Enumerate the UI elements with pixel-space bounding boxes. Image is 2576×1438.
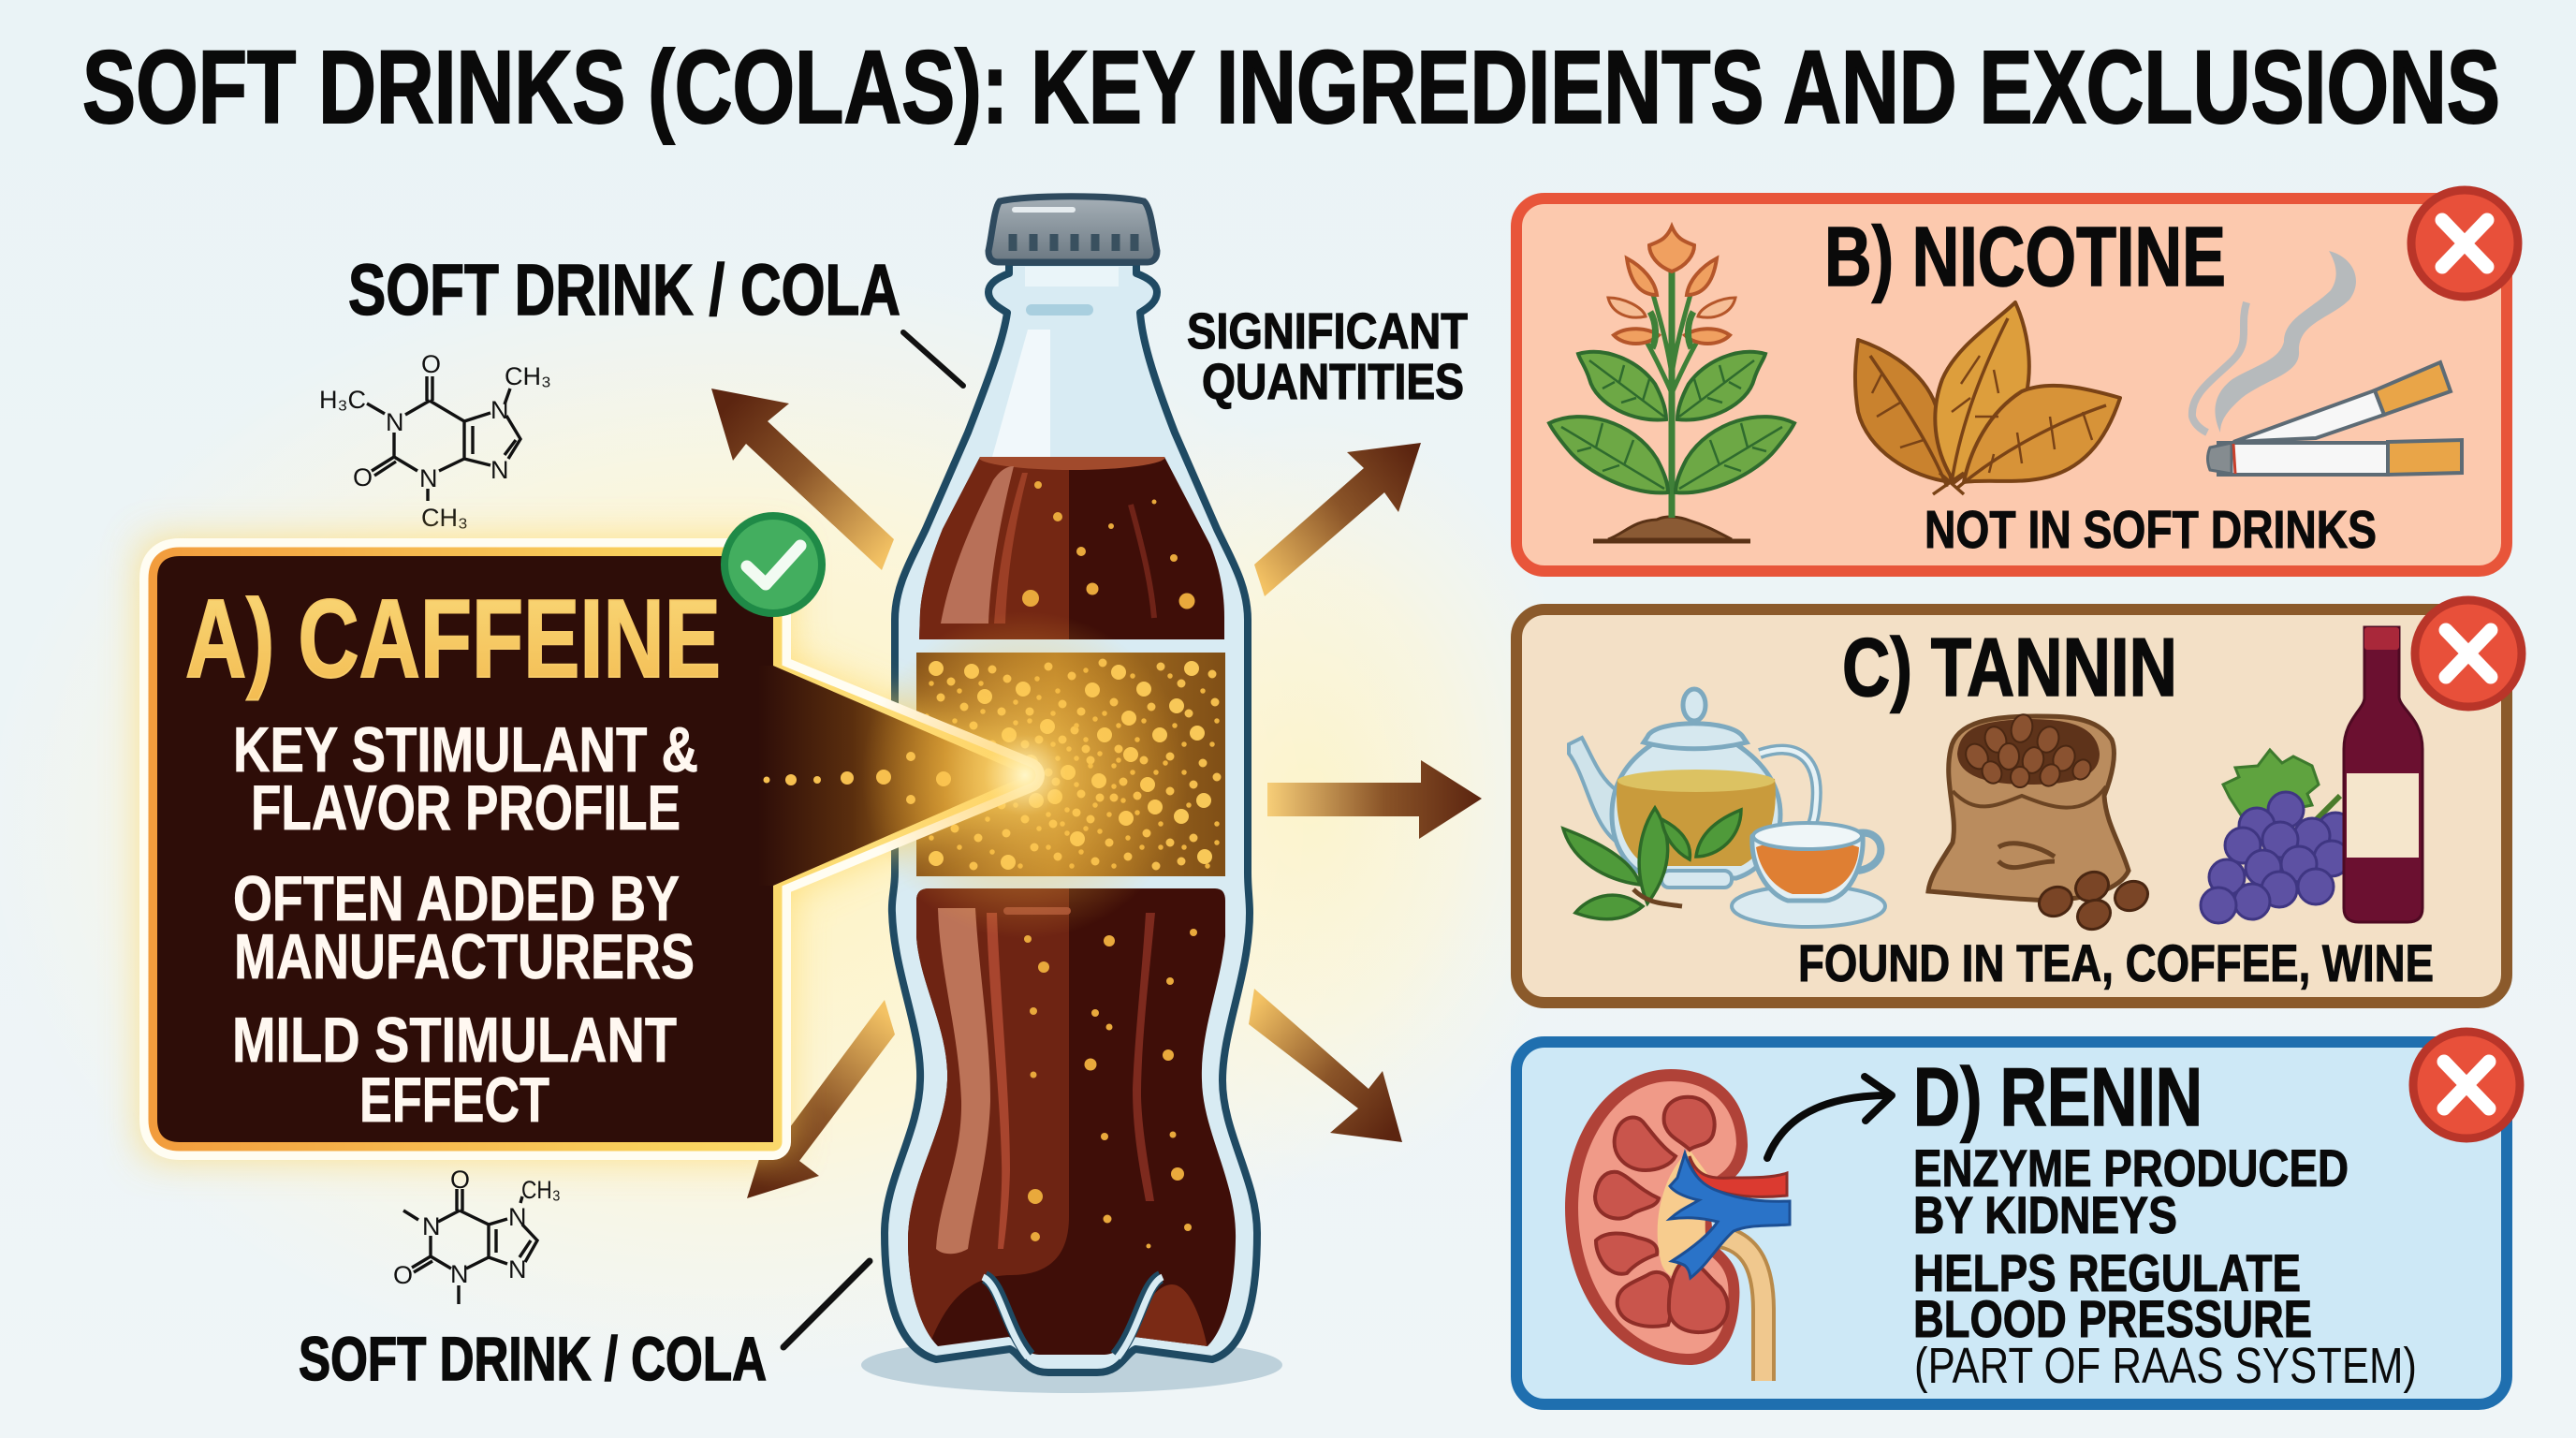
text: mild stimulant: EFFECT [359,1064,549,1136]
caffeine molecule top: O [421,350,441,378]
pointer sparkle dots [764,752,951,804]
caffeine molecule bottom: O [450,1166,470,1194]
caffeine molecule top: N [490,456,509,484]
text: enzyme produced by kidneys: BY KIDNEYS [1913,1185,2177,1244]
arrow: middle right [1267,760,1482,839]
caffeine molecule bottom: N [508,1203,526,1231]
caffeine molecule top: CH₃ [421,504,468,532]
text: helps regulate blood pressure [1913,1243,2312,1348]
bottle base notches [983,1277,1163,1357]
upper liquid [919,457,1224,639]
arrow: upper left [711,389,894,570]
text: found in tea, coffee, wine: FOUND IN TEA, COFFEE, WINE [1798,933,2434,992]
label: soft drink / cola top [348,250,963,386]
caffeine molecule top: O [353,463,373,492]
text: key stimulant: FLAVOR PROFILE [251,772,681,844]
text: mild stimulant: MILD STIMULANT [232,1005,677,1076]
icon: cigarettes [2207,362,2462,475]
caffeine molecule top: CH₃ [505,362,551,390]
caffeine molecule bottom: N [422,1212,440,1240]
pointer gradient [758,666,1027,886]
icon: smoke wisp [2192,302,2247,433]
icon: X badge [2413,1032,2520,1138]
text: helps regulate blood pressure: HELPS REGULATE [1913,1243,2301,1302]
icon: X badge [2415,600,2522,707]
text: helps regulate blood pressure: BLOOD PRESSURE [1913,1289,2312,1348]
text: key stimulant: KEY STIMULANT & [233,714,698,785]
icon: tobacco leaves [1855,302,2120,494]
heading: B) Nicotine: B) NICOTINE [1824,211,2226,304]
text: key stimulant [233,714,698,844]
label band with bubbles [916,653,1225,876]
heading: D) Renin: D) RENIN [1913,1050,2203,1143]
icon: kidney [1565,1069,1790,1381]
panel D: renin [1516,1032,2520,1404]
icon: curved arrow [1767,1077,1892,1158]
heading: C) Tannin: C) TANNIN [1842,621,2177,713]
text: enzyme produced by kidneys: ENZYME PRODUCED [1913,1138,2349,1197]
lower liquid [894,885,1245,1357]
panel C: tannin [1516,600,2522,1003]
label: soft drink / cola top: SOFT DRINK / COLA [348,250,900,330]
icon: coffee sack [1928,712,2153,934]
label: significant quantities: QUANTITIES [1202,354,1464,410]
icon: green check badge [724,516,822,613]
caffeine molecule bottom: N [508,1255,526,1284]
caffeine molecule top: H₃C [319,386,366,414]
heading: A) CAFFEINE: A) CAFFEINE [185,577,721,701]
text: not in soft drinks: NOT IN SOFT DRINKS [1925,500,2377,560]
caffeine molecule top: N [386,408,404,436]
caffeine molecule bottom [393,1166,561,1304]
bottle cap [988,197,1157,262]
caffeine molecule bottom: CH₃ [521,1176,561,1204]
caffeine molecule bottom: O [393,1261,413,1289]
tip glow [861,611,1189,939]
text: often added [233,863,695,992]
label: soft drink / cola bottom: SOFT DRINK / COLA [299,1324,767,1393]
text: often added: OFTEN ADDED BY [233,863,680,934]
icon: wine bottle [2344,627,2422,922]
caffeine molecule bottom: N [450,1260,468,1288]
caffeine molecule top: N [490,396,509,424]
icon: teapot [1569,689,1817,888]
caffeine molecule top: N [419,464,438,492]
icon: grapes and leaf [2201,750,2353,923]
text: part of RAAS system: (PART OF RAAS SYSTEM) [1914,1338,2417,1394]
label: soft drink / cola bottom [299,1261,870,1393]
arrow: lower left [747,1000,895,1198]
label: significant quantities [1187,303,1468,410]
icon: tea leaves [1563,808,1741,919]
icon: tobacco plant [1549,227,1794,541]
panel A: caffeine [157,556,1027,1142]
bottle glass [885,262,1257,1372]
icon: smoke [2215,251,2356,433]
arrow: upper right [1254,443,1421,596]
caffeine molecule top [319,350,551,532]
icon: tea cup [1732,823,1885,927]
panel B: nicotine [1516,190,2518,571]
text: mild stimulant [232,1005,677,1136]
text: enzyme produced by kidneys [1913,1138,2349,1244]
text: often added: MANUFACTURERS [234,921,695,992]
arrow: lower right [1249,989,1402,1142]
label: significant quantities: SIGNIFICANT [1187,303,1468,360]
bottle [861,197,1282,1393]
icon: X badge [2411,190,2518,297]
